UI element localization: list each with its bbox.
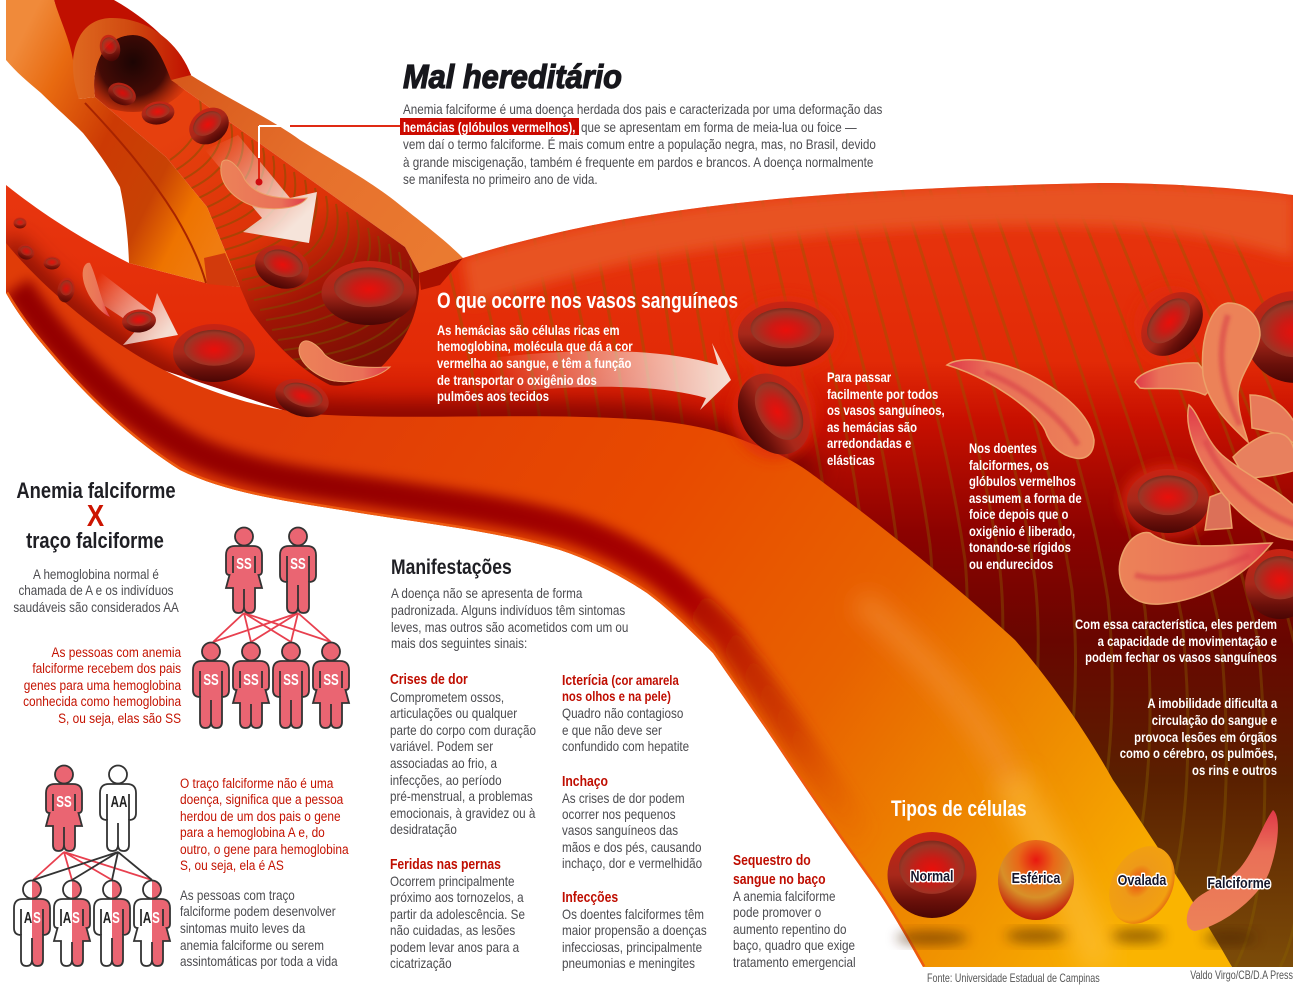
heading: anemia vs trait: X: [87, 499, 104, 534]
text: SS: As pessoas com anemia: [52, 644, 182, 660]
text: trait definition: outro, o gene para hemoglobina: [180, 841, 349, 857]
source: Fonte: Universidade Estadual de Campinas: [927, 973, 1100, 985]
arrow: main vessel: [490, 343, 731, 410]
text: movement: Com essa característica, eles perdem: [1075, 616, 1277, 632]
text: SS: falciforme recebem dos pais: [32, 660, 182, 676]
block: sequestro: Sequestro do: [733, 852, 811, 868]
block: inchaco: mãos e dos pés, causando: [562, 839, 701, 855]
block: sequestro: baço, quadro que exige: [733, 937, 855, 953]
intro paragraph: que se apresentam em forma de meia-lua ou foice —: [581, 119, 857, 135]
upper vessel front wall: [6, 0, 240, 287]
text: immobility: provoca lesões em órgãos: [1134, 729, 1277, 745]
text: round cells: Para passar: [827, 369, 891, 385]
diagram: AS inheritance: SS: [56, 792, 72, 810]
text: trait symptoms: [180, 887, 338, 969]
text: round cells: [827, 369, 945, 468]
block: crises de dor: infecções, ao período: [390, 772, 502, 788]
block: crises de dor: emocionais, à gravidez ou à: [390, 805, 536, 821]
lower vessel wall: [6, 243, 1232, 967]
block: crises de dor: Crises de dor: [390, 671, 468, 687]
cell: spherical: Esférica: [1012, 869, 1061, 886]
text: hemacias: As hemácias são células ricas em: [437, 322, 620, 338]
shadow above lower wall: [6, 243, 816, 477]
block: infeccoes: pneumonias e meningites: [562, 955, 695, 971]
red blood cells in main vessel: [723, 280, 1300, 619]
text: immobility: circulação do sangue e: [1152, 712, 1277, 728]
cell: normal: [888, 832, 976, 918]
text: trait definition: O traço falciforme não é uma: [180, 775, 334, 791]
block: inchaco: ocorrer nos pequenos: [562, 806, 676, 822]
vessel opening arch: [73, 18, 191, 99]
cell: oval: [1096, 835, 1188, 935]
diagram: AS inheritance: S: [152, 908, 160, 926]
heading: anemia vs trait: traço falciforme: [26, 530, 164, 553]
block: crises de dor: associadas ao frio, a: [390, 755, 498, 771]
block: crises de dor: desidratação: [390, 821, 457, 837]
block: inchaco: As crises de dor podem: [562, 790, 685, 806]
block: inchaco: vasos sanguíneos das: [562, 822, 678, 838]
heading: anemia vs trait: [16, 480, 176, 553]
intro paragraph: se manifesta no primeiro ano de vida.: [403, 171, 598, 187]
text: movement: podem fechar os vasos sanguíneos: [1085, 649, 1277, 665]
diagram: AS inheritance: A: [103, 908, 111, 926]
block: ictericia: Icterícia (cor amarela: [562, 672, 679, 688]
text: hemacias: vermelha ao sangue, e têm a função: [437, 355, 632, 371]
diagram: AS inheritance: S: [33, 908, 41, 926]
text: normal hemoglobin: [13, 566, 179, 615]
text: sickle form: falciformes, os: [969, 457, 1049, 473]
text: trait symptoms: sintomas muito leves da: [180, 920, 306, 936]
block: feridas nas pernas: não cuidadas, as lesões: [390, 922, 515, 938]
text: trait symptoms: falciforme podem desenvolver: [180, 903, 336, 919]
text: hemacias: [437, 322, 633, 404]
heading: cell types: Tipos de células: [891, 797, 1027, 822]
block: crises de dor: variável. Podem ser: [390, 738, 494, 754]
diagram: AS inheritance: S: [72, 908, 80, 926]
block: infeccoes: [562, 889, 707, 971]
block: ictericia: nos olhos e na pele): [562, 689, 671, 704]
intro paragraph: [400, 101, 882, 187]
block: infeccoes: maior propensão a doenças: [562, 922, 707, 938]
block: feridas nas pernas: partir da adolescência. Se: [390, 906, 525, 922]
text: trait symptoms: assintomáticas por toda a vida: [180, 953, 338, 969]
block: inchaco: inchaço, dor e vermelhidão: [562, 855, 702, 871]
heading: anemia vs trait: Anemia falciforme: [16, 480, 176, 503]
text: trait definition: doença, significa que a pessoa: [180, 791, 344, 807]
intro paragraph: Anemia falciforme é uma doença herdada dos pais e caracterizada por uma deformação das: [403, 101, 882, 117]
text: hemacias: hemoglobina, molécula que dá a cor: [437, 338, 633, 354]
text: trait definition: herdou de um dos pais o gene: [180, 808, 341, 824]
block: feridas nas pernas: cicatrização: [390, 955, 452, 971]
cell: sickle: [1187, 810, 1278, 931]
diagram: SS inheritance: [193, 528, 349, 728]
block: crises de dor: articulações ou qualquer: [390, 705, 518, 721]
cell: sickle: Falciforme: [1207, 874, 1271, 891]
vessel interior: [6, 183, 1293, 967]
text: sickle form: glóbulos vermelhos: [969, 473, 1076, 489]
text: round cells: as hemácias são: [827, 419, 917, 435]
block: ictericia: confundido com hepatite: [562, 738, 689, 754]
text: manifestations intro: [391, 585, 628, 651]
text: sickle form: oxigênio é liberado,: [969, 523, 1075, 539]
block: sequestro: [733, 852, 856, 970]
text: SS: S, ou seja, elas são SS: [58, 710, 181, 726]
text: round cells: os vasos sanguíneos,: [827, 402, 945, 418]
text: manifestations intro: leves, mas outros são acometidos com um ou: [391, 619, 628, 635]
shadows under cell types: [896, 929, 1256, 945]
diagram: AS inheritance: S: [112, 908, 120, 926]
text: round cells: arredondadas e: [827, 435, 911, 451]
block: crises de dor: pré-menstrual, a problemas: [390, 788, 533, 804]
text: hemacias: pulmões aos tecidos: [437, 388, 549, 404]
block: feridas nas pernas: Feridas nas pernas: [390, 856, 501, 872]
text: trait symptoms: anemia falciforme ou serem: [180, 937, 324, 953]
text: movement: [1075, 616, 1277, 665]
block: ictericia: e que não deve ser: [562, 722, 663, 738]
diagram: AS inheritance: A: [63, 908, 71, 926]
cell: normal: Normal: [910, 867, 954, 884]
sickle cell: lower: [299, 341, 390, 382]
block: infeccoes: Infecções: [562, 889, 618, 905]
title: Mal hereditário: [403, 58, 622, 95]
block: feridas nas pernas: Ocorrem principalmente: [390, 873, 515, 889]
block: inchaco: Inchaço: [562, 773, 608, 789]
panel: cell types: [888, 797, 1278, 935]
diagram: AS inheritance: AA: [111, 792, 127, 810]
diagram: AS inheritance: [14, 766, 170, 966]
block: sequestro: A anemia falciforme: [733, 888, 835, 904]
text: SS: conhecida como hemoglobina: [23, 693, 182, 709]
text: normal hemoglobin: A hemoglobina normal é: [33, 566, 159, 582]
text: manifestations intro: A doença não se apresenta de forma: [391, 585, 583, 601]
arrow: upper vessel: [205, 135, 317, 243]
text: movement: a capacidade de movimentação e: [1098, 633, 1277, 649]
intro paragraph: à grande miscigenação, também é frequente em pardos e brancos. A doença normalmente: [403, 154, 873, 170]
cell: oval: Ovalada: [1118, 871, 1167, 888]
diagram: AS inheritance: A: [143, 908, 151, 926]
text: trait definition: S, ou seja, ela é AS: [180, 857, 284, 873]
credit: Valdo Virgo/CB/D.A Press: [1190, 970, 1293, 982]
block: crises de dor: Comprometem ossos,: [390, 689, 504, 705]
intro paragraph: vem daí o termo falciforme. É mais comum entre a população negra, mas, no Brasil, devido: [403, 136, 876, 152]
text: round cells: elásticas: [827, 452, 875, 468]
block: ictericia: Quadro não contagioso: [562, 705, 683, 721]
text: trait definition: [180, 775, 349, 873]
text: normal hemoglobin: saudáveis são considerados AA: [13, 599, 179, 615]
block: feridas nas pernas: [390, 856, 525, 971]
diagram: SS inheritance: SS: [283, 670, 299, 688]
diagram: SS inheritance: SS: [290, 554, 306, 572]
block: sequestro: tratamento emergencial: [733, 954, 856, 970]
block: sequestro: aumento repentino do: [733, 921, 847, 937]
block: inchaco: [562, 773, 702, 871]
text: hemacias: de transportar o oxigênio dos: [437, 372, 597, 388]
leader line to sickle cell: [256, 126, 402, 186]
diagram: SS inheritance: SS: [243, 670, 259, 688]
diagram: SS inheritance: SS: [323, 670, 339, 688]
block: infeccoes: Os doentes falciformes têm: [562, 906, 704, 922]
intro paragraph: hemácias (glóbulos vermelhos),: [403, 119, 575, 135]
sickle cell: upper vessel: [221, 160, 307, 209]
text: immobility: os rins e outros: [1192, 762, 1277, 778]
text: sickle form: ou endurecidos: [969, 556, 1053, 572]
cell glow in main vessel: [732, 286, 1215, 538]
text: sickle form: [969, 440, 1082, 572]
upper vessel back wall: [171, 74, 463, 273]
block: ictericia: [562, 672, 689, 754]
text: round cells: facilmente por todos: [827, 386, 938, 402]
text: immobility: como o cérebro, os pulmões,: [1120, 745, 1277, 761]
text: normal hemoglobin: chamada de A e os indivíduos: [18, 582, 174, 598]
block: crises de dor: [390, 671, 536, 837]
arrow: lower vessel: [88, 272, 178, 345]
text: immobility: A imobilidade dificulta a: [1147, 695, 1278, 711]
block: infeccoes: infecciosas, principalmente: [562, 939, 702, 955]
cutaway interior with stripes: [94, 35, 420, 386]
text: immobility: [1120, 695, 1278, 778]
text: sickle form: assumem a forma de: [969, 490, 1082, 506]
block: feridas nas pernas: próximo aos tornozelos, a: [390, 889, 524, 905]
sickle cell: lower vessel small: [83, 263, 110, 317]
block: sequestro: pode promover o: [733, 904, 821, 920]
sickle cells in main vessel: [947, 303, 1296, 604]
upper vessel wall band: [463, 183, 1293, 305]
text: sickle form: Nos doentes: [969, 440, 1037, 456]
diagram: SS inheritance: SS: [236, 554, 252, 572]
text: SS: [23, 644, 182, 726]
text: manifestations intro: padronizada. Alguns indivíduos têm sintomas: [391, 602, 625, 618]
text: sickle form: tonando-se rígidos: [969, 539, 1071, 555]
text: SS: genes para uma hemoglobina: [24, 677, 182, 693]
diagram: SS inheritance: SS: [203, 670, 219, 688]
block: crises de dor: parte do corpo com duração: [390, 722, 536, 738]
heading: vessels: O que ocorre nos vasos sanguíneos: [437, 289, 738, 314]
text: sickle form: foice depois que o: [969, 506, 1069, 522]
heading: manifestations: Manifestações: [391, 556, 512, 579]
text: trait symptoms: As pessoas com traço: [180, 887, 295, 903]
block: sequestro: sangue no baço: [733, 871, 826, 887]
red blood cells in upper vessels: [14, 32, 416, 424]
text: trait definition: para a hemoglobina A e, do: [180, 824, 325, 840]
cell: spherical: [998, 840, 1074, 920]
diagram: AS inheritance: A: [24, 908, 32, 926]
block: feridas nas pernas: podem levar anos para a: [390, 939, 520, 955]
text: manifestations intro: mais dos seguintes sinais:: [391, 635, 527, 651]
upper vessel dark top: [54, 0, 191, 90]
